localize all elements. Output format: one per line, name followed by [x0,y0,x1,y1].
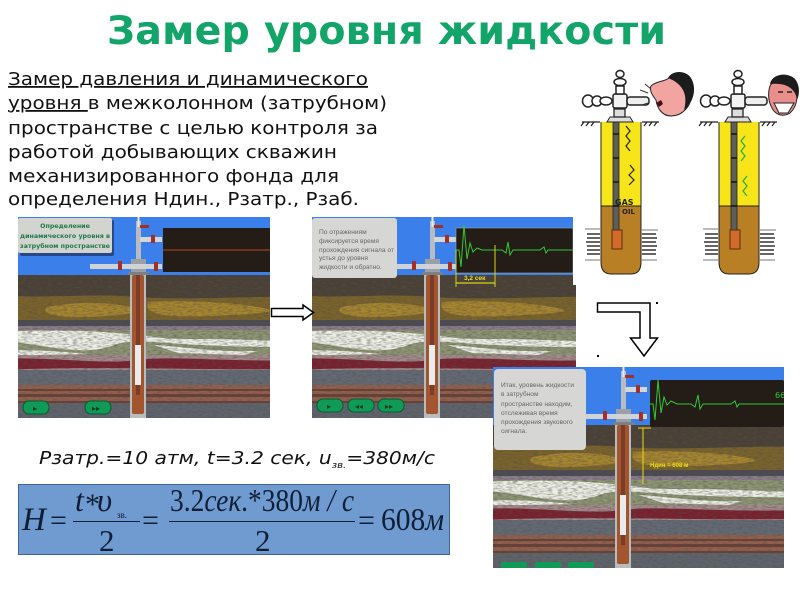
label card 1 [18,218,114,256]
label card 3: прохождения звукового [501,419,573,426]
formula box: 608м [381,501,444,537]
depth marker: Ндин = 608 м [650,463,689,469]
description text block: работой добывающих скважин [8,142,337,163]
oscilloscope screen 2 [456,225,573,287]
label card 3: Итак, уровень жидкости [501,382,574,389]
depth marker [638,428,689,484]
panel: simulation step 1: ▸▸ [92,404,100,413]
label card 3 [494,369,586,450]
description text block: Замер давления и динамического [8,69,368,90]
label card 1: динамического уровня в [20,233,110,240]
formula box: t [75,482,85,518]
label card 3: в затрубном [501,390,539,398]
label card 2: жидкости и обратно. [319,263,382,271]
formula box: 3.2сек.*380м / с [170,482,354,518]
description text block: уровня в межколонном (затрубном) [8,93,387,114]
formula box: 2 [99,523,114,558]
oscilloscope screen 2: 3,2 сек [464,275,486,282]
formula box [18,482,450,558]
title: Замер уровня жидкости [107,8,666,54]
play buttons [23,401,111,414]
label card 2: По отражениям [319,229,367,236]
formula box: * [85,488,100,521]
cartoon: two wells with faces [581,70,799,274]
label card 1: Определение [40,223,90,230]
parameters line: зв. [332,461,346,471]
well 1 with shouting face: OIL [622,208,636,216]
formula box: зв. [117,510,127,520]
panel: simulation step 2: ▸▸ [385,402,393,411]
formula box: = [142,504,159,537]
label card 3: сигнала. [501,428,527,435]
description text block: пространстве с целью контроля за [8,118,378,139]
arrow: down [598,303,658,356]
label card 1: затрубном пространстве [20,242,110,250]
label card 2: устья до уровня [319,255,368,262]
panel: simulation step 1 [18,217,270,418]
panel: simulation step 2 [312,217,576,418]
formula box: = [358,504,375,537]
panel: simulation step 1: ▸ [33,404,37,413]
label card 2: прохождения сигнала от [319,247,394,254]
panel: simulation step 2: ▸ [327,402,331,411]
panel: simulation step 3 [483,367,800,568]
formula box: 2 [255,523,270,558]
description text block: определения Ндин., Рзатр., Рзаб. [8,189,359,210]
description text block [8,69,387,210]
well 2 with grinning face [699,70,799,274]
label card 2: фиксируется время [319,238,379,245]
label card 2 [312,218,397,278]
panel: simulation step 2: ◂◂ [355,402,363,411]
formula box: H [21,502,48,538]
parameters line: Рзатр.=10 атм, t=3.2 сек, u [39,448,300,469]
oscilloscope screen 3: 66 [775,391,785,400]
label card 3: отслеживая время [501,410,558,417]
description text block: механизированного фонда для [8,166,339,187]
formula box: υ [97,483,112,519]
oscilloscope screen 3 [650,380,785,427]
parameters line: =380м/с [346,448,435,469]
buttons [501,562,594,568]
oscilloscope screen 1 [163,228,270,272]
label card 3: пространстве находим, [501,401,573,408]
formula box: = [50,504,67,537]
well 1 with shouting face: GAS [615,198,634,207]
control buttons [317,399,404,412]
well 1 with shouting face [581,70,694,274]
arrow: right [272,305,314,320]
